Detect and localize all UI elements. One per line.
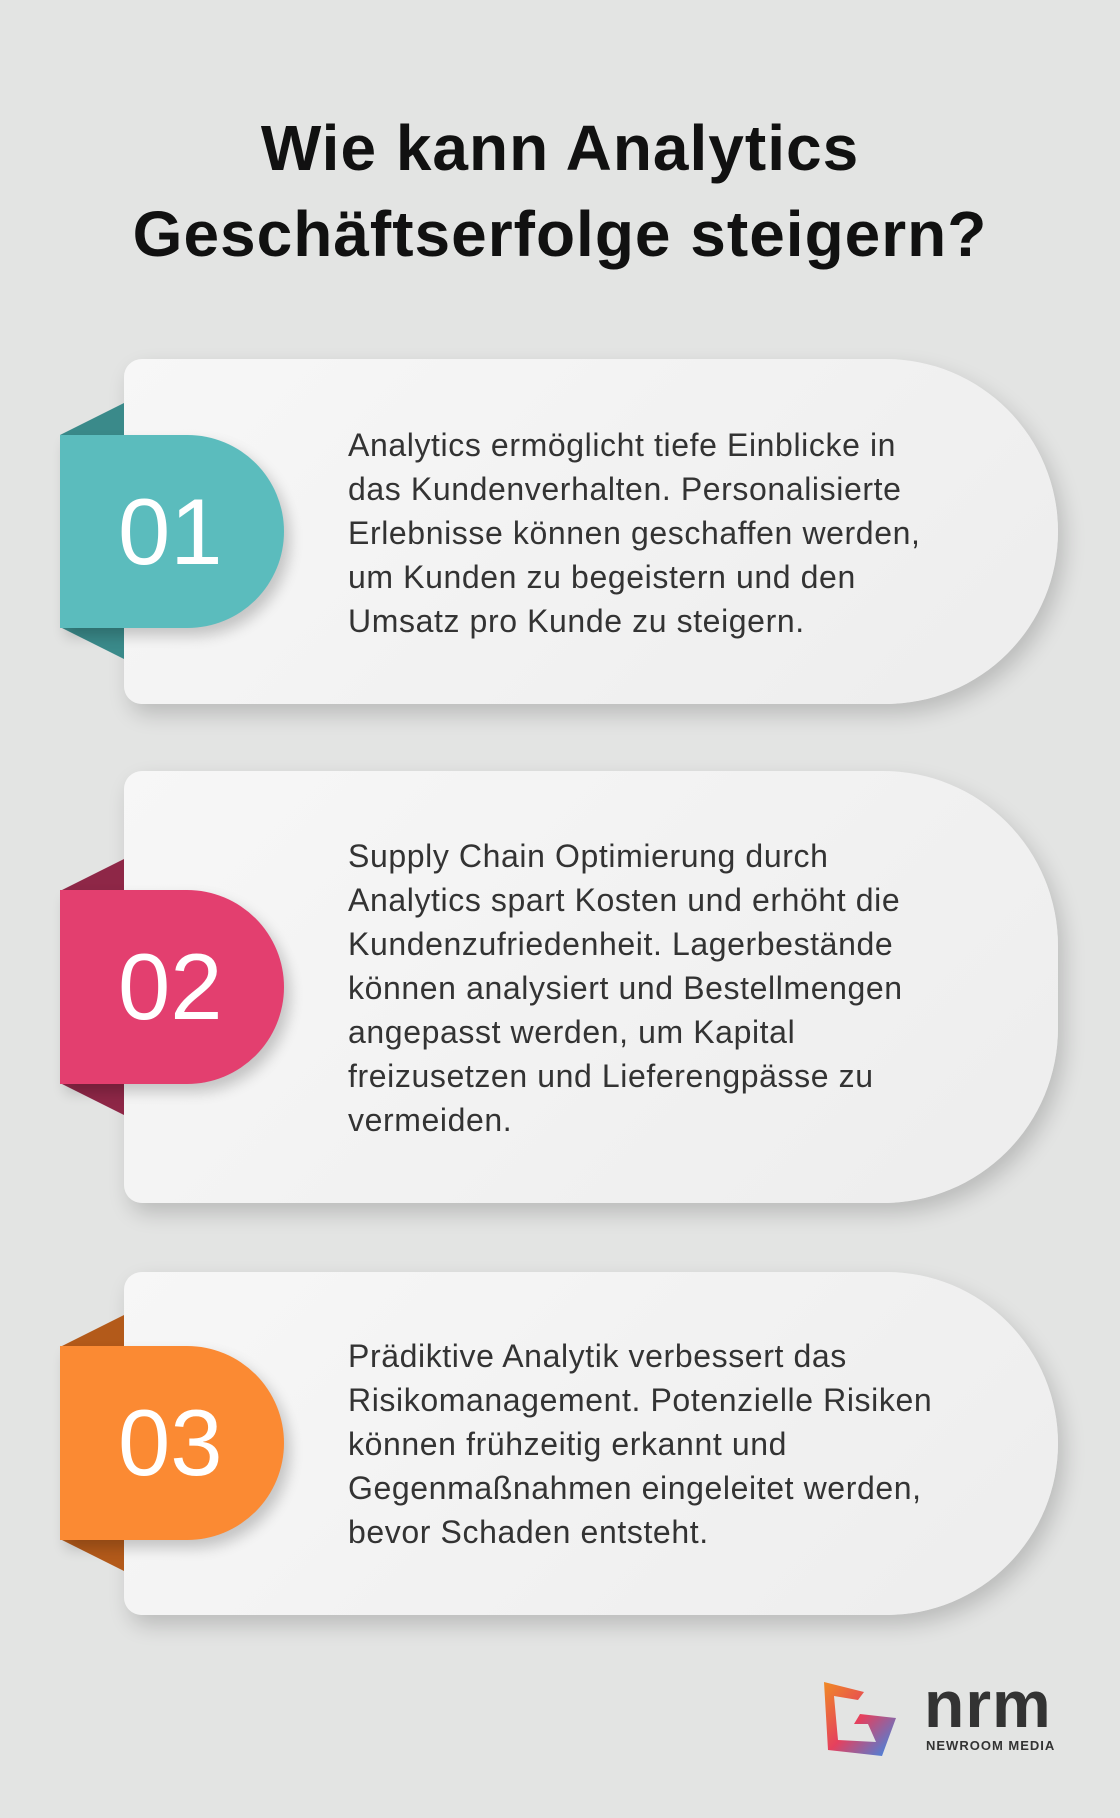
title: Geschäftserfolge steigern? (133, 198, 987, 270)
number tab 02 (60, 890, 284, 1084)
text 3: Prädiktive Analytik verbessert das (348, 1338, 847, 1374)
icon: logo mark (824, 1682, 896, 1756)
number tab 01 (60, 435, 284, 628)
text 2: angepasst werden, um Kapital (348, 1014, 795, 1050)
number tab 02: 02 (118, 934, 223, 1039)
fold bottom 3 (62, 1540, 124, 1571)
fold top 2 (62, 859, 124, 890)
text 2: Supply Chain Optimierung durch (348, 838, 828, 874)
text 2: freizusetzen und Lieferengpässe zu (348, 1058, 874, 1094)
number tab 03: 03 (118, 1390, 223, 1495)
text 3 (348, 1338, 932, 1550)
text 2 (348, 838, 903, 1138)
number tab 03 (60, 1346, 284, 1540)
title: Wie kann Analytics (261, 112, 859, 184)
fold top 1 (60, 403, 124, 435)
text 1: um Kunden zu begeistern und den (348, 559, 856, 595)
text 3: Risikomanagement. Potenzielle Risiken (348, 1382, 932, 1418)
text 1: Umsatz pro Kunde zu steigern. (348, 603, 805, 639)
fold bottom 2 (62, 1084, 124, 1115)
panel: card 3 (124, 1272, 1058, 1615)
number tab 01: 01 (118, 478, 223, 584)
text 1: Analytics ermöglicht tiefe Einblicke in (348, 427, 896, 463)
text 1: Erlebnisse können geschaffen werden, (348, 515, 920, 551)
panel: card 2 (124, 771, 1058, 1203)
text 3: bevor Schaden entsteht. (348, 1514, 709, 1550)
fold bottom 1 (62, 628, 124, 659)
text 2: Analytics spart Kosten und erhöht die (348, 882, 900, 918)
text 1: das Kundenverhalten. Personalisierte (348, 471, 902, 507)
text 2: vermeiden. (348, 1102, 512, 1138)
text 1 (348, 427, 920, 639)
text 2: können analysiert und Bestellmengen (348, 970, 903, 1006)
logo text: nrm (924, 1667, 1052, 1741)
text 3: Gegenmaßnahmen eingeleitet werden, (348, 1470, 922, 1506)
fold top 3 (62, 1315, 124, 1346)
panel: card 1 (124, 359, 1058, 704)
text 2: Kundenzufriedenheit. Lagerbestände (348, 926, 893, 962)
title (133, 112, 987, 270)
logo: NEWROOM MEDIA (926, 1738, 1055, 1753)
logo (824, 1667, 1055, 1756)
text 3: können frühzeitig erkannt und (348, 1426, 787, 1462)
